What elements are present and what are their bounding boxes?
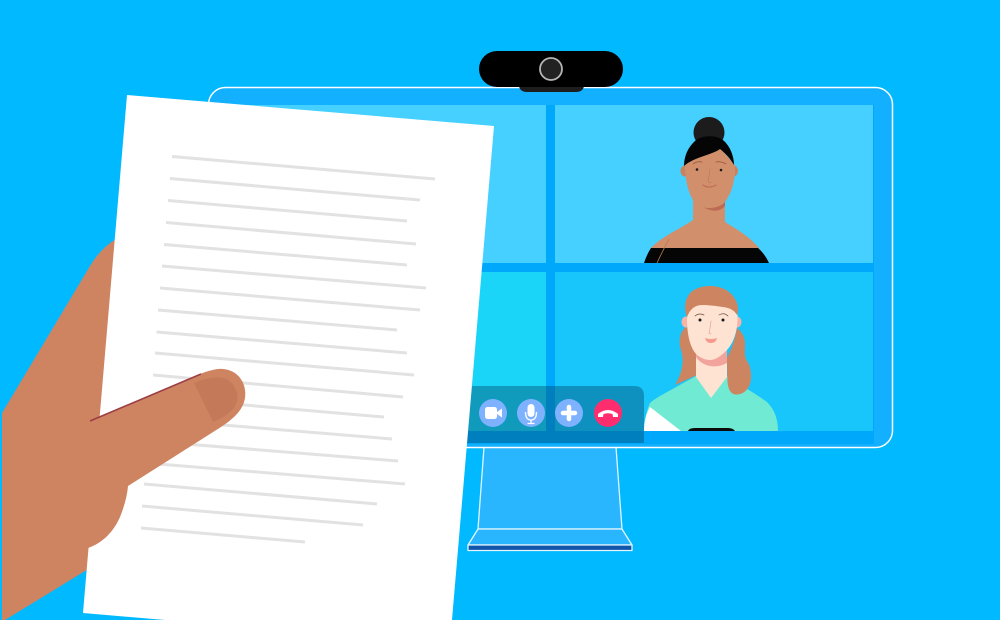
- neck shadow: [696, 345, 727, 366]
- webcam lens: [540, 58, 562, 80]
- face: [687, 298, 738, 360]
- webcam: [479, 51, 623, 92]
- hair fringe: [685, 286, 738, 317]
- document: [83, 95, 494, 620]
- text lines: [141, 156, 435, 542]
- eyes: [696, 168, 722, 171]
- thumb and palm: [80, 369, 245, 548]
- video tile: top right: [555, 105, 873, 263]
- video tile: bottom left: [226, 272, 546, 431]
- thumb: [80, 369, 245, 548]
- neck: [696, 345, 727, 398]
- button: add: [555, 399, 583, 427]
- bar background: [440, 386, 644, 443]
- back hair left: [675, 327, 697, 385]
- dark detail at collar base: [688, 428, 735, 431]
- shirt: [644, 376, 778, 431]
- button: video: [479, 399, 507, 427]
- hand behind document: [2, 239, 130, 620]
- video tile: bottom right: [555, 272, 873, 431]
- hair bun: [694, 117, 724, 148]
- white sleeve: [644, 407, 681, 431]
- paper sheet: [83, 95, 494, 620]
- thumb crease: [90, 374, 201, 421]
- participant: woman with auburn hair: [644, 286, 778, 431]
- monitor frame: [208, 88, 892, 448]
- mouth: [705, 338, 717, 343]
- hair: [684, 136, 734, 166]
- webcam body: [479, 51, 623, 87]
- front hair lock: [727, 328, 751, 395]
- neck shadow: [704, 202, 725, 211]
- eyes: [698, 318, 724, 322]
- brows and nose: [695, 314, 728, 334]
- shoulders and neck: [650, 190, 760, 249]
- call control bar: [440, 386, 644, 443]
- button: hang up: [594, 399, 622, 427]
- video tile: top left: [226, 105, 546, 263]
- monitor: [208, 88, 892, 448]
- monitor stand: [468, 447, 632, 550]
- thumb nail: [194, 377, 237, 422]
- black top: [644, 248, 769, 263]
- button: microphone: [517, 399, 545, 427]
- strap line: [657, 239, 669, 263]
- screen backing: [226, 105, 874, 444]
- ears: [680, 166, 738, 176]
- participant: woman with hair bun: [644, 117, 769, 263]
- face: [685, 148, 735, 207]
- facial lines: [693, 162, 726, 187]
- ears: [682, 316, 742, 328]
- webcam mount: [519, 86, 584, 92]
